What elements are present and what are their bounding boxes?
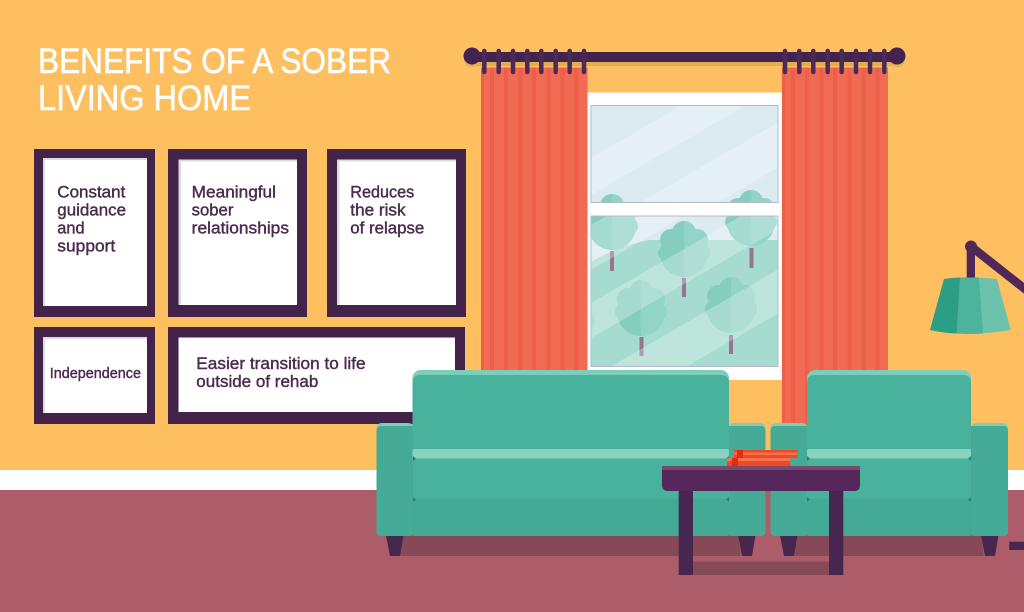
sofa shadow <box>400 536 741 556</box>
right arm <box>728 423 766 536</box>
cushion strip <box>807 449 971 458</box>
left curtain <box>481 68 588 388</box>
frame: constant guidance and support: support <box>57 238 116 256</box>
frame: meaningful sober relationships: Meaningful <box>192 184 276 202</box>
lamp arm <box>971 246 1024 293</box>
frame: reduces the risk of relapse: the risk <box>350 202 406 220</box>
frame: meaningful sober relationships <box>168 149 307 317</box>
frame: easier transition to life outside of rehab <box>168 327 465 424</box>
title: BENEFITS OF A SOBER <box>38 42 391 81</box>
coffee table <box>662 466 860 575</box>
title: LIVING HOME <box>38 79 251 118</box>
right curtain <box>782 68 888 430</box>
base <box>807 498 971 536</box>
table legs <box>679 488 693 575</box>
window <box>588 92 782 380</box>
frame: meaningful sober relationships: relationships <box>192 220 289 238</box>
floor <box>0 490 1024 612</box>
frame: reduces the risk of relapse: of relapse <box>350 220 424 238</box>
curtain rod <box>464 48 906 72</box>
window frame <box>587 92 782 380</box>
frame: constant guidance and support <box>34 149 155 317</box>
title <box>38 42 391 118</box>
frame: independence: Independence <box>50 366 141 382</box>
seat <box>413 458 729 498</box>
left arm <box>376 423 414 536</box>
floor lamp <box>930 240 1024 550</box>
sofa <box>376 370 766 556</box>
lower pane with hills and trees <box>592 216 778 366</box>
frame: constant guidance and support: Constant <box>57 184 126 202</box>
frame: meaningful sober relationships: sober <box>192 202 234 220</box>
pane borders <box>591 106 778 366</box>
seat <box>807 458 971 498</box>
armchair <box>770 370 1008 556</box>
baseboard <box>0 470 1024 490</box>
cushion strip <box>412 449 729 458</box>
lamp foot <box>1009 542 1024 550</box>
upper pane with treetops <box>592 106 778 202</box>
lamp shade <box>930 278 1011 334</box>
sofa legs <box>386 536 404 556</box>
frame: easier transition to life outside of rehab: Easier transition to life <box>196 355 366 373</box>
chair back <box>807 370 971 460</box>
seat notches <box>413 456 729 502</box>
right arm <box>971 423 1008 536</box>
table shadow <box>693 562 829 575</box>
left arm <box>770 423 808 536</box>
frame: easier transition to life outside of rehab: outside of rehab <box>196 373 318 391</box>
frame: reduces the risk of relapse <box>327 149 466 317</box>
base <box>413 498 729 536</box>
books <box>727 450 798 466</box>
frame: constant guidance and support: guidance <box>57 202 126 220</box>
armchair legs <box>780 536 798 556</box>
armchair shadow <box>794 536 984 556</box>
frame: reduces the risk of relapse: Reduces <box>350 184 414 202</box>
frame: independence <box>34 327 155 424</box>
table top <box>662 466 860 491</box>
frame: constant guidance and support: and <box>57 220 85 238</box>
seat notches <box>807 456 971 502</box>
wall <box>0 0 1024 470</box>
sofa back <box>412 370 729 460</box>
